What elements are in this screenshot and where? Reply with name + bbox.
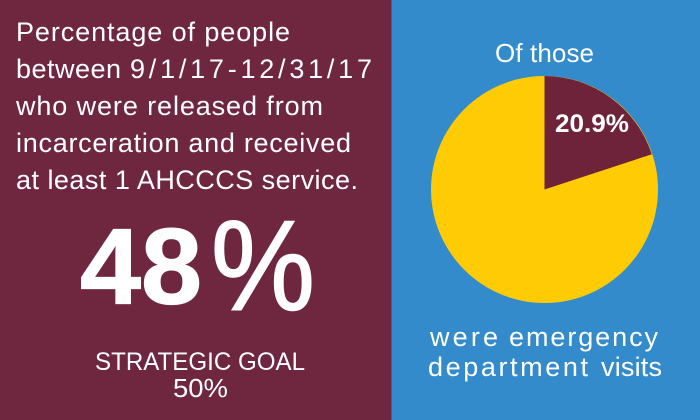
text block: description: incarceration and received bbox=[16, 128, 351, 158]
pie slice: remainder bbox=[431, 76, 658, 303]
text block: description: who were released from bbox=[15, 91, 323, 121]
text block: strategic goal: 50% bbox=[173, 373, 228, 403]
text block: emergency department visits: department bbox=[428, 352, 588, 382]
big statistic: 48% bbox=[80, 195, 315, 338]
heading: of those: Of those bbox=[495, 38, 594, 68]
text block: emergency department visits: emergency bbox=[509, 322, 658, 352]
pie chart bbox=[431, 76, 658, 303]
text block: description: Percentage of people bbox=[16, 17, 290, 47]
big statistic: 48%: % bbox=[211, 195, 315, 338]
text block: emergency department visits bbox=[428, 322, 662, 382]
big statistic: 48%: 48 bbox=[80, 206, 202, 326]
text block: description: 9/1/17-12/31/17 bbox=[130, 54, 372, 84]
pie label: 20.9%: 20.9% bbox=[555, 110, 629, 138]
text block: strategic goal bbox=[95, 348, 305, 403]
text block: emergency department visits: visits bbox=[601, 352, 662, 382]
text block: emergency department visits: were bbox=[429, 322, 498, 352]
text block: description bbox=[15, 17, 372, 195]
text block: description: between bbox=[16, 54, 121, 84]
text block: strategic goal: STRATEGIC GOAL bbox=[95, 348, 305, 376]
text block: description: at least 1 AHCCCS service. bbox=[16, 165, 358, 195]
panel: maroon statistic panel bbox=[0, 0, 392, 420]
pie slice: 20.9% bbox=[544, 76, 652, 190]
